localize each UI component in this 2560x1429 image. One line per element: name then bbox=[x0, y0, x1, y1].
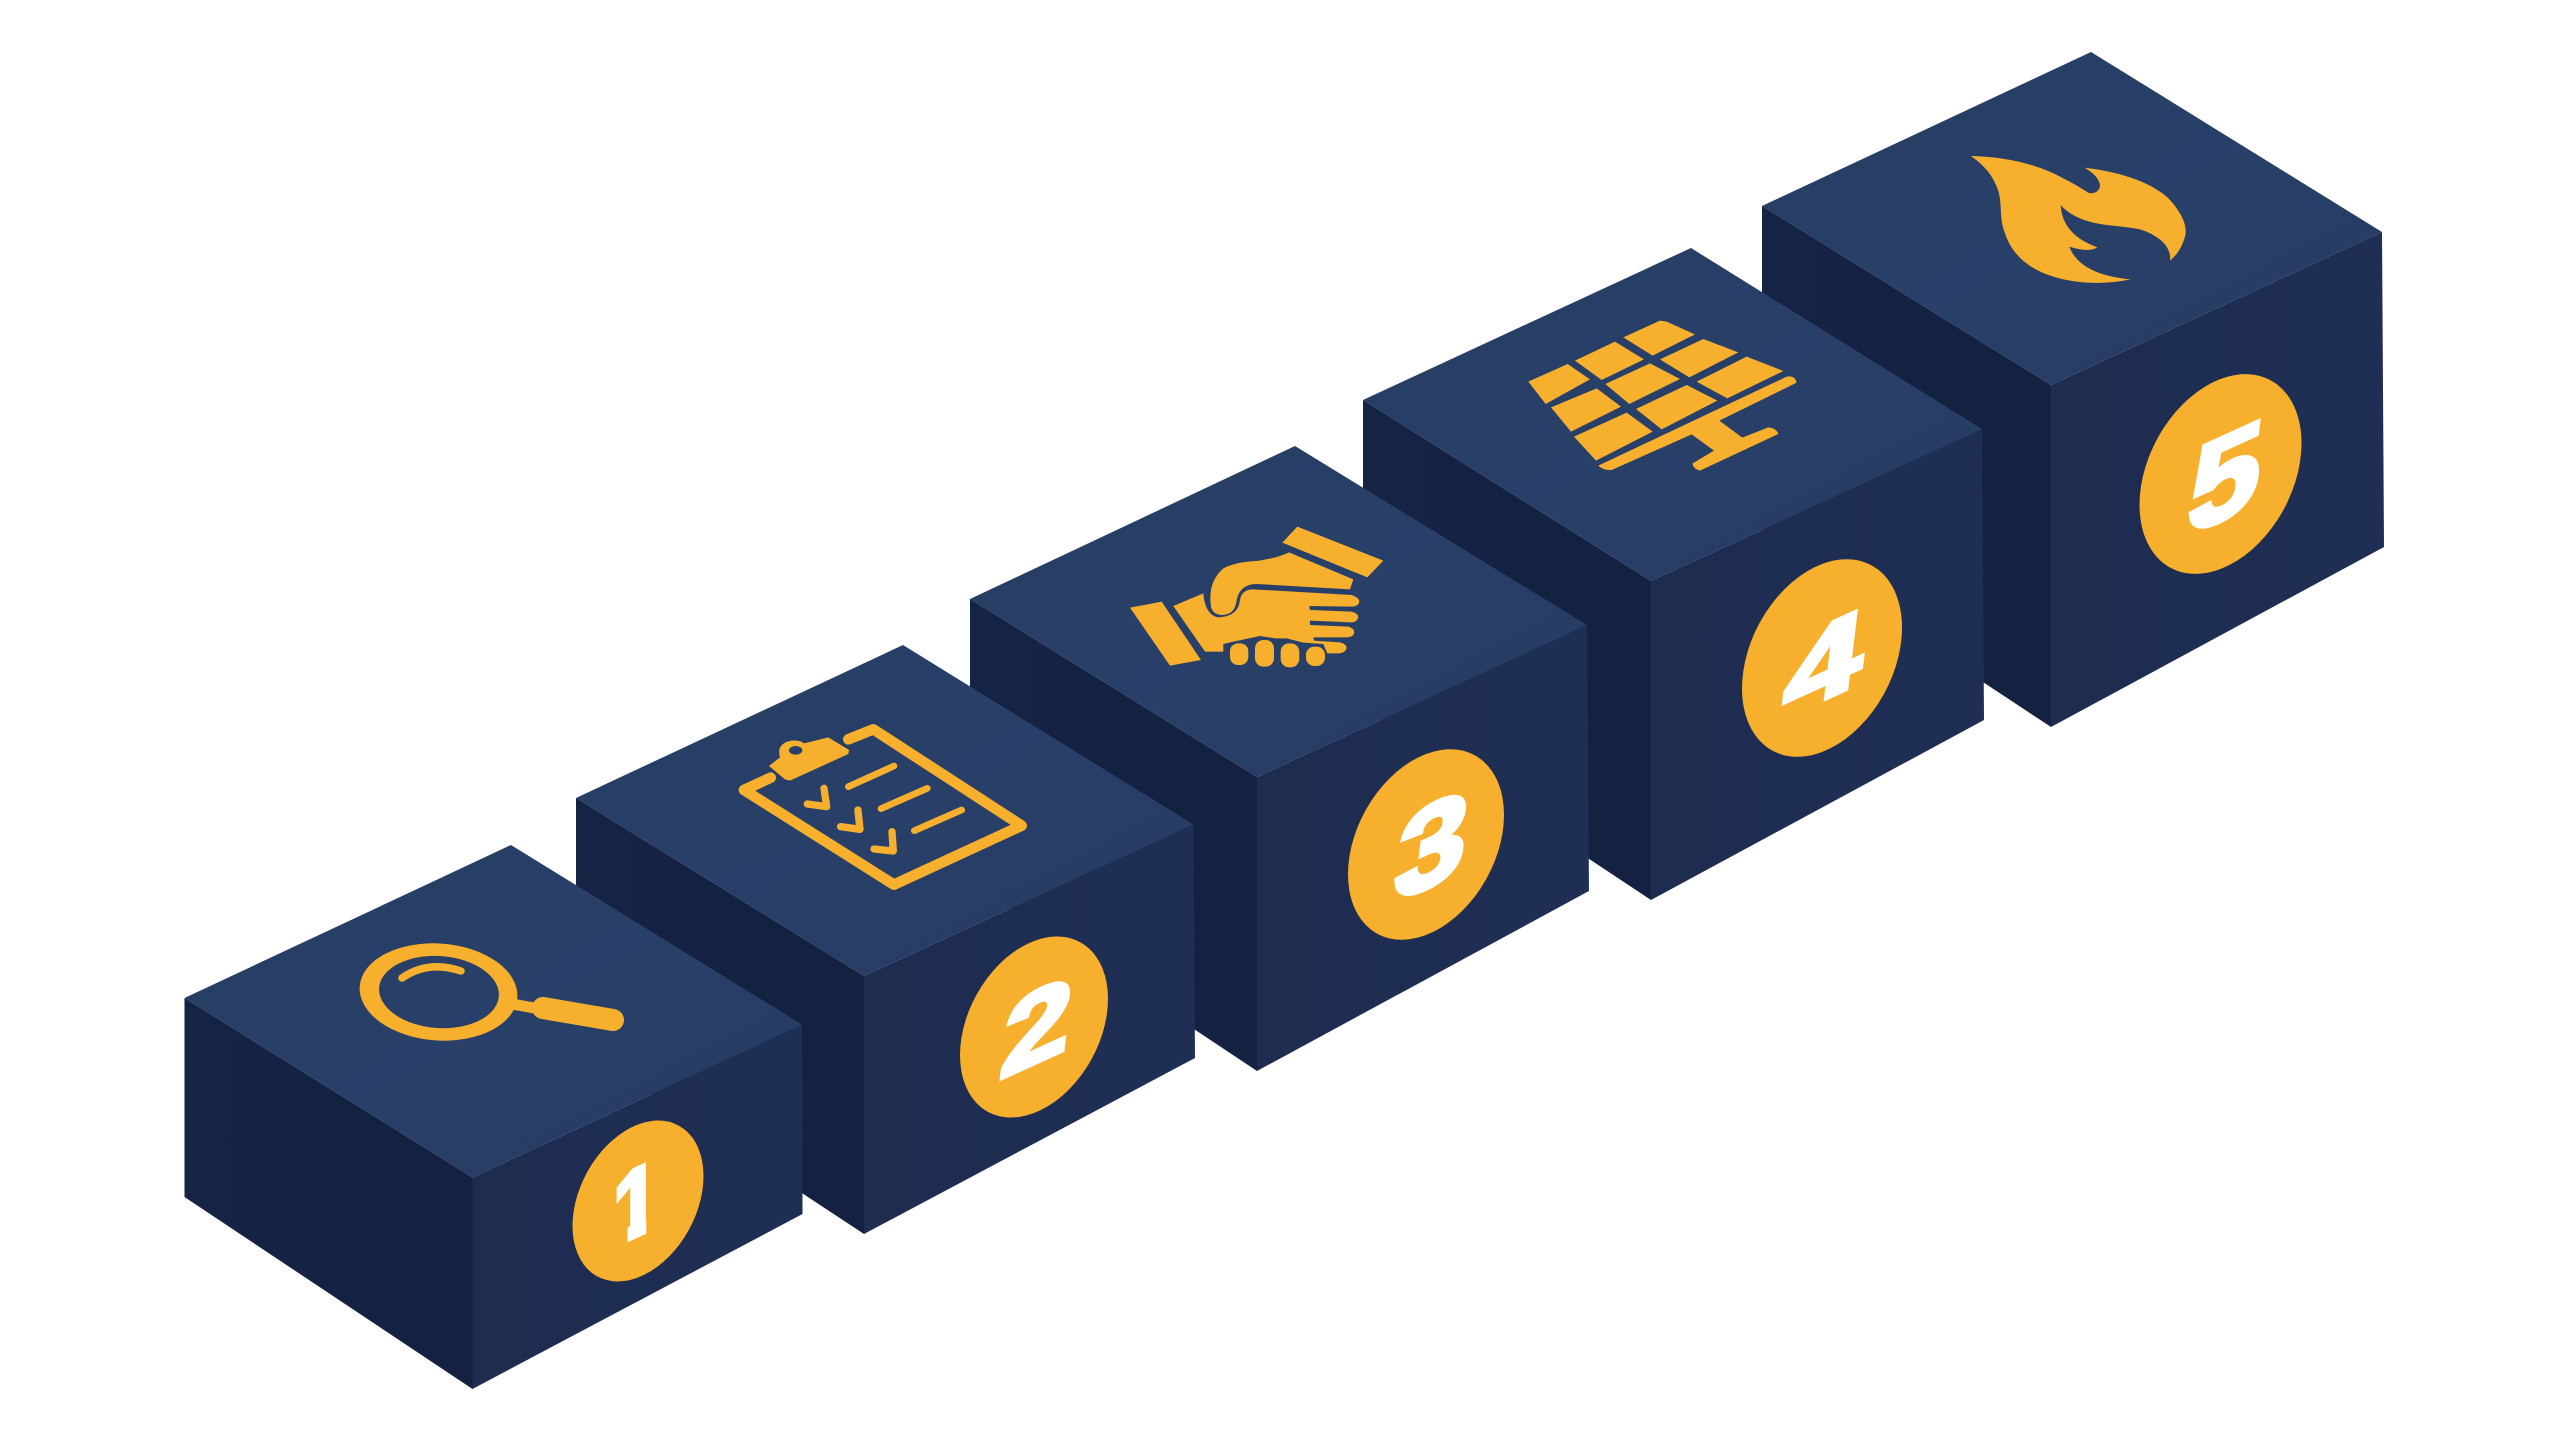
icon: flame bbox=[1971, 156, 2186, 283]
top face bbox=[184, 845, 802, 1178]
right face bbox=[2051, 232, 2384, 727]
number badge 3: 3 bbox=[1388, 761, 1476, 930]
number badge 1 bbox=[572, 1120, 704, 1282]
right face bbox=[472, 1024, 802, 1389]
icon: magnifying glass bbox=[356, 938, 613, 1046]
top face bbox=[1762, 52, 2382, 385]
left face bbox=[576, 798, 864, 1234]
left face bbox=[970, 599, 1257, 1071]
block 5 bbox=[1762, 52, 2384, 727]
number badge 2 bbox=[960, 913, 1108, 1141]
icon: handshake bbox=[1130, 527, 1383, 667]
right face bbox=[1257, 625, 1589, 1071]
block 2 bbox=[576, 645, 1195, 1234]
icon: clipboard checklist bbox=[744, 729, 1022, 885]
number badge 5 bbox=[2140, 348, 2302, 600]
block 3 bbox=[970, 446, 1589, 1071]
left face bbox=[1363, 400, 1651, 900]
top face bbox=[970, 446, 1587, 777]
right face bbox=[1651, 429, 1984, 900]
number badge 4: 4 bbox=[1778, 582, 1871, 743]
number badge 3 bbox=[1348, 724, 1504, 965]
number badge 2: 2 bbox=[995, 952, 1078, 1103]
number badge 1: 1 bbox=[613, 1138, 659, 1267]
block 1 bbox=[184, 845, 802, 1389]
top face bbox=[1363, 248, 1982, 581]
icon: solar panel bbox=[1528, 321, 1797, 471]
number badge 4 bbox=[1742, 534, 1902, 782]
left face bbox=[184, 998, 472, 1389]
top face bbox=[576, 645, 1194, 976]
number badge 5: 5 bbox=[2181, 392, 2270, 563]
block 4 bbox=[1363, 248, 1984, 900]
left face bbox=[1762, 206, 2051, 727]
right face bbox=[864, 824, 1195, 1234]
